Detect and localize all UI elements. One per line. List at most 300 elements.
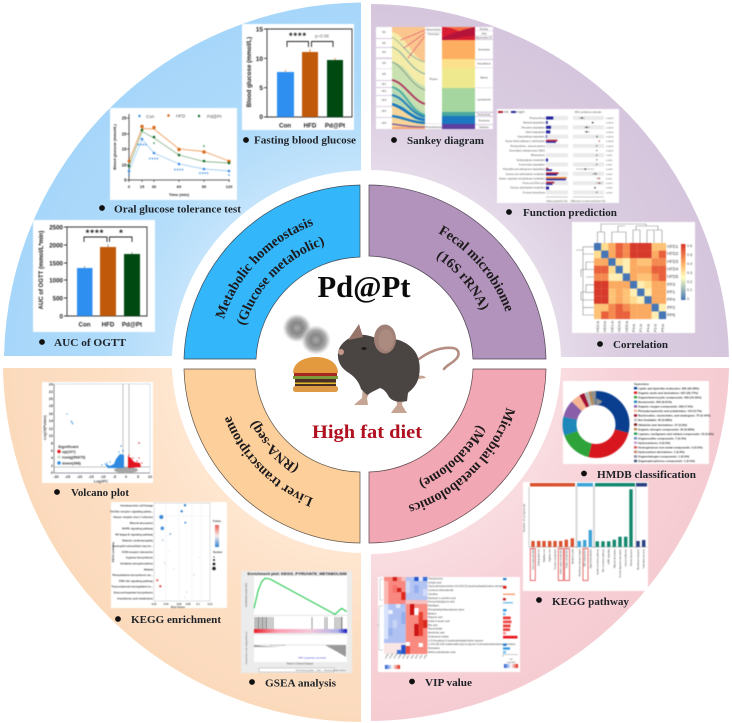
- chart: volcano plot: 0: [125, 475, 127, 479]
- heading sector: fecal microbiome: (16S rRNA): [436, 252, 488, 310]
- panel: metabolic homeostasis outer quadrant: [4, 2, 361, 356]
- chart: function prediction: Glycerolipid, sulfoquinovose SQDG: [509, 150, 545, 152]
- label: AUC of OGTT: AUC of OGTT: [54, 338, 126, 349]
- chart: correlation heatmap: PP5: [667, 312, 676, 318]
- chart: correlation heatmap: P4-b: [646, 324, 650, 332]
- chart: sankey diagram: Lactobacillus: [477, 98, 492, 102]
- chart: volcano plot: nosig(56875): [62, 456, 86, 460]
- heading sector: liver transcriptome: (RNA-seq): [250, 421, 298, 472]
- chart: KEGG pathway: Membrane transport: [637, 549, 640, 570]
- chart: fasting blood glucose: 10: [256, 56, 263, 63]
- heading sector: metabolic homeostasis: [184, 184, 360, 360]
- chart: function prediction: 95% confidence intervals: [575, 111, 602, 114]
- chart: oral glucose tolerance test: ****: [137, 144, 148, 150]
- chart: correlation heatmap: HFD1: [667, 244, 679, 249]
- chart: function prediction: Difference in mean proportion (%): [571, 200, 605, 203]
- chart: VIP value: PP1: [407, 654, 411, 660]
- chart: volcano plot: 4: [51, 456, 54, 460]
- chart: KEGG pathway: Bile secretion pathway: [602, 548, 605, 572]
- chart: function prediction: 0.0006: [606, 160, 613, 162]
- chart: KEGG enrichment: Number: [213, 551, 222, 554]
- chart: KEGG pathway: Histidine met: [543, 549, 546, 562]
- chart: sankey diagram: Roseburia: [479, 120, 490, 122]
- chart: KEGG pathway: Arginine met: [549, 549, 552, 562]
- chart: volcano plot: -Log10(Pvalue): [43, 415, 47, 441]
- chart: oral glucose tolerance test: 0: [128, 184, 131, 189]
- chart: volcano plot: 8: [51, 442, 53, 446]
- chart: HMDB classification: Organic acids and derivatives: 637 (20.77%): [638, 391, 698, 395]
- chart: VIP value: PP2: [411, 654, 415, 660]
- chart: GSEA analysis: Enrichment profile — Hits — Ranking metric scores: [296, 669, 347, 672]
- chart: sankey diagram: W1: [382, 31, 386, 34]
- chart: sankey diagram: [376, 27, 493, 129]
- chart: fasting blood glucose: ****: [289, 31, 307, 41]
- chart: function prediction: Superpathway degradation: [518, 136, 546, 139]
- chart: correlation heatmap: P2-b: [654, 324, 658, 332]
- chart: fasting blood glucose: 5: [259, 85, 263, 92]
- chart: VIP value: Betaine: [428, 612, 437, 615]
- chart: KEGG enrichment: Diabetic cardiomyopathy: [122, 538, 154, 542]
- chart: volcano plot: 22: [49, 390, 53, 394]
- chart: volcano plot: -15: [88, 475, 94, 479]
- chart: volcano plot: -30: [53, 475, 59, 479]
- label: fasting blood glucose: Fasting blood glucose: [254, 136, 356, 146]
- label: sankey diagram: Sankey diagram: [407, 136, 484, 147]
- chart: volcano plot: -20: [77, 475, 82, 479]
- chart: sankey diagram: Faecalibacul: [477, 62, 491, 66]
- chart: function prediction: Fructose biosynthesis: [523, 191, 546, 194]
- chart: function prediction: 0.00031: [606, 137, 614, 139]
- chart: VIP value: Cholesterol sulfate: [428, 635, 449, 638]
- chart: oral glucose tolerance test: *: [153, 142, 155, 148]
- chart: HMDB classification: Organosulfur compounds: 7 (0.4%): [638, 436, 686, 440]
- chart: oral glucose tolerance test: 15: [140, 184, 145, 189]
- chart: VIP value: HFD1: [385, 653, 390, 660]
- chart: KEGG enrichment: Phenylalanine biosynthesis etc...: [112, 573, 153, 577]
- chart: VIP value: Taurocholate: [428, 628, 443, 631]
- chart: function prediction: 0.0011: [606, 178, 613, 180]
- chart: function prediction: [497, 109, 619, 203]
- chart: fasting blood glucose: 0: [259, 114, 263, 121]
- heading sector: liver transcriptome: Liver transcriptome: [225, 416, 314, 507]
- chart: GSEA analysis: [241, 571, 352, 673]
- heading sector: liver transcriptome: [184, 368, 360, 544]
- chart: KEGG enrichment: Arginine biosynthesis: [126, 556, 154, 560]
- chart: KEGG enrichment: 0.02: [152, 603, 157, 606]
- chart: volcano plot: 12: [49, 427, 53, 431]
- chart: correlation heatmap: 0.6: [687, 244, 692, 248]
- chart: VIP value: PP3: [415, 654, 420, 660]
- chart: correlation heatmap: HFD4: [667, 266, 679, 272]
- chart: VIP value: Glycerophosphocholine (14:0/22:5) lysophosphatidylcholine derivative: [428, 585, 506, 588]
- chart: VIP value: Riboflavin: [428, 604, 440, 608]
- chart: VIP value: Myristoleic: [428, 647, 441, 650]
- label: volcano plot: Volcano plot: [71, 488, 130, 499]
- chart: function prediction: Alanine, aspartate and glutamate metabolism: [499, 177, 545, 180]
- chart: fasting blood glucose: HFD: [304, 122, 317, 130]
- heading sector: metabolic homeostasis: (Glucose metabolic): [237, 236, 324, 325]
- chart: function prediction: Glucose carbohydrate metabolism: [510, 187, 545, 190]
- chart: sankey diagram: Firmicutes: [428, 33, 440, 36]
- chart: oral glucose tolerance test: *: [228, 174, 230, 180]
- chart: HMDB classification: Organohalogen compounds: 1 (0.0%): [638, 455, 689, 459]
- chart: volcano plot: Log2FC: [94, 480, 108, 484]
- label: function prediction: Function prediction: [523, 208, 617, 219]
- label: KEGG enrichment: KEGG enrichment: [131, 615, 222, 626]
- chart: VIP value: HFD5: [402, 653, 408, 660]
- chart: VIP value: Myristoyl-L-carnitine acid: [428, 597, 456, 600]
- chart: oral glucose tolerance test: 15: [122, 146, 127, 152]
- chart: VIP value: Uridylic acid: [428, 581, 442, 584]
- chart: VIP value: Theobromine: [428, 578, 443, 580]
- chart: KEGG enrichment: Malaria: [144, 567, 154, 571]
- dendrograms: [598, 224, 662, 243]
- chart: oral glucose tolerance test: 20: [122, 132, 127, 136]
- chart: function prediction: Pd@Pt: [517, 111, 525, 114]
- chart: sankey diagram: W2: [382, 42, 386, 45]
- chart: oral glucose tolerance test: 10: [122, 162, 127, 168]
- chart: HMDB classification: Organic oxygen compounds: 269 (7.0%): [638, 405, 693, 409]
- chart: function prediction: Photosynthesis - antenna proteins: [510, 145, 546, 148]
- chart: correlation heatmap: P5-b: [661, 324, 665, 332]
- chart: GSEA analysis: 'HFD' (negatively correlated): [298, 656, 326, 660]
- label: GSEA analysis: GSEA analysis: [265, 678, 336, 690]
- chart: function prediction: Sucrose and carbohydrate metabolism: [506, 173, 545, 176]
- chart: volcano plot: 20: [49, 397, 53, 401]
- chart: GSEA analysis: Zero score at 5765: [270, 644, 285, 647]
- chart: HMDB classification: Phenylpropanoids and polyketides: 154 (5.7%): [638, 409, 702, 413]
- chart: sankey diagram: Dubosiella: [478, 48, 490, 52]
- chart: correlation heatmap: 0.5: [687, 253, 692, 257]
- chart: AUC of OGTT: 1000: [49, 278, 64, 284]
- chart: AUC of OGTT: 2500: [49, 224, 64, 232]
- chart: KEGG enrichment: Rich Factor: [171, 605, 185, 609]
- icon: nanoparticles: [284, 314, 330, 354]
- chart: KEGG enrichment: ECM-receptor interaction: [122, 550, 153, 554]
- chart: GSEA analysis: Ranked list metric (Signal2Noise): [245, 632, 248, 664]
- chart: oral glucose tolerance test: 60: [177, 184, 182, 189]
- chart: HMDB classification: Lignans, neolignans and related compounds: 16 (0.8%): [638, 432, 714, 436]
- label: correlation: Correlation: [613, 340, 668, 351]
- chart: VIP value: -log10(P): [506, 662, 516, 664]
- chart: function prediction: 0.0013: [606, 183, 613, 185]
- chart: KEGG pathway: Insulin secretion pathway: [596, 548, 599, 575]
- chart: volcano plot: 10: [49, 434, 53, 438]
- chart: KEGG pathway: Purine metabolism: [565, 549, 568, 568]
- chart: sankey diagram: W5: [382, 73, 386, 76]
- chart: VIP value: 1,2-Di-(9Z,12Z-octadecadienoyl)-sn-glycero-3-phosphoethanolamine derivative: [428, 643, 516, 646]
- chart: volcano plot: -5: [113, 475, 116, 479]
- chart: KEGG enrichment: Glucose/Aspartate biosynthesis: [114, 590, 154, 594]
- chart: function prediction: 0.00015: [606, 123, 614, 125]
- label: HMDB classification: HMDB classification: [597, 470, 696, 481]
- chart: HMDB classification: Organophosphorus compounds: 1 (0.0%): [638, 459, 695, 463]
- chart: KEGG pathway: Glycerophospholipid: [532, 548, 535, 570]
- chart: correlation heatmap: HFD2: [667, 251, 679, 256]
- chart: VIP value: HFD4: [398, 653, 403, 660]
- chart: KEGG enrichment: 0.12: [208, 603, 213, 606]
- chart: KEGG enrichment: Arachidonic acid metabolism: [117, 596, 154, 600]
- chart: volcano plot: -25: [65, 475, 70, 479]
- chart: function prediction: HFD: [504, 111, 509, 114]
- chart: oral glucose tolerance test: [110, 108, 237, 200]
- chart: oral glucose tolerance test: *: [203, 145, 205, 151]
- chart: HMDB classification: Benzenoids: 305 (9.91%): [638, 400, 672, 404]
- chart: KEGG enrichment: KEGG pathway: [111, 541, 115, 562]
- chart: AUC of OGTT: Pd@Pt: [122, 322, 142, 328]
- chart: oral glucose tolerance test: 25: [122, 116, 127, 120]
- chart: AUC of OGTT: 1500: [49, 260, 64, 268]
- chart: volcano plot: 24: [49, 382, 54, 386]
- chart: VIP value: Indole-3-acetic acid: [428, 620, 450, 623]
- chart: HMDB classification: Not Available: 30 (0.98%): [638, 418, 672, 422]
- chart: KEGG pathway: Tyrosine metabolism: [554, 549, 557, 570]
- label: oral glucose tolerance test: Oral glucose tolerance test: [114, 204, 242, 216]
- chart: sankey diagram: Muribac: [480, 28, 489, 31]
- chart: KEGG pathway: Amino sugar metabolism: [560, 549, 563, 574]
- chart: AUC of OGTT: Con: [78, 322, 91, 328]
- chart: AUC of OGTT: [33, 220, 155, 332]
- chart: function prediction: 0.00047: [606, 150, 614, 152]
- chart: sankey diagram: Ileibacter: [479, 126, 489, 129]
- chart: fasting blood glucose: Con: [279, 122, 291, 130]
- chart: correlation heatmap: 0: [687, 297, 689, 301]
- chart: oral glucose tolerance test: HFD: [176, 114, 186, 118]
- chart: KEGG pathway: Mineral absorption: [613, 548, 616, 568]
- chart: KEGG pathway: [522, 482, 648, 591]
- chart: AUC of OGTT: ****: [86, 228, 104, 239]
- chart: correlation heatmap: PP2: [667, 305, 676, 310]
- chart: VIP value: VIP: [509, 659, 513, 661]
- chart: KEGG enrichment: 0.1: [196, 603, 200, 606]
- chart: function prediction: 0.00024: [606, 132, 614, 134]
- chart: function prediction: Fucose/xylan degradation: [519, 164, 546, 166]
- chart: KEGG enrichment: 0.04: [164, 603, 169, 606]
- chart: KEGG enrichment: Herpes simplex virus 1 infection: [113, 515, 153, 519]
- chart: volcano plot: Significant: [58, 444, 79, 449]
- chart: VIP value: HFD3: [394, 653, 399, 660]
- chart: HMDB classification: Organoheterocyclic compounds: 460 (15.00%): [638, 395, 701, 399]
- chart: HMDB classification: Organic nitrogen compounds: 30 (0.98%): [638, 427, 694, 431]
- chart: volcano plot: 2: [51, 464, 53, 468]
- chart: KEGG enrichment: Hematopoietic cell lineage: [120, 504, 154, 508]
- chart: VIP value: 1-O-Hexadecyl-2-lysophosphatidylcholine species: [428, 639, 484, 642]
- chart: KEGG enrichment: Transcriptional misregulation in...: [111, 585, 153, 589]
- chart: volcano plot: 16: [49, 412, 53, 416]
- chart: correlation heatmap: 0.1: [687, 288, 692, 292]
- chart: function prediction: 0.0008: [606, 169, 613, 171]
- chart: HMDB classification: [563, 381, 714, 464]
- chart: sankey diagram: HF2: [382, 90, 387, 93]
- donut chart: [570, 398, 622, 451]
- chart: KEGG enrichment: 0.06: [177, 603, 182, 606]
- chart: HMDB classification: Hydrocarbon derivatives: 1 (0.0%): [638, 450, 685, 454]
- heading sector: fecal microbiome: [368, 184, 546, 360]
- label: VIP value: [409, 678, 472, 689]
- chart: VIP value: Citrulline: [428, 593, 438, 596]
- chart: sankey diagram: W4: [382, 62, 386, 65]
- chart: KEGG enrichment: PI3K-Akt signaling pathway: [119, 579, 154, 583]
- chart: VIP value: Linoleoyl ethanolamide: [428, 589, 454, 592]
- chart: sankey diagram: Proteobacteria: [425, 126, 442, 129]
- chart: oral glucose tolerance test: 30: [152, 184, 157, 189]
- chart: function prediction: Purine and DNA cycle: [523, 182, 546, 185]
- chart: volcano plot: 10: [148, 475, 152, 479]
- chart: function prediction: 0.00041: [606, 146, 614, 148]
- chart: correlation heatmap: HD5-b: [625, 321, 629, 332]
- chart: KEGG enrichment: Neutrophil extracellular trap for...: [112, 544, 153, 548]
- icon: mouse: [338, 324, 459, 413]
- chart: oral glucose tolerance test: ****: [199, 172, 209, 178]
- chart: function prediction: Glycan folded pathway in carbohydrate: [505, 140, 546, 143]
- chart: volcano plot: down(398): [62, 462, 82, 466]
- chart: sankey diagram: Romboutsia: [478, 114, 491, 116]
- chart: sankey diagram: HF3: [382, 99, 387, 102]
- chart: HMDB classification: Superclass: [634, 382, 649, 386]
- chart: function prediction: 0.0007: [606, 164, 613, 166]
- chart: volcano plot: 18: [49, 404, 53, 408]
- chart: VIP value: Phosphatidylethanolamine lysine: [428, 608, 465, 611]
- chart: correlation heatmap: PP4: [667, 297, 676, 302]
- chart: sankey diagram: Blautia: [480, 76, 488, 80]
- chart: oral glucose tolerance test: ****: [174, 168, 184, 174]
- chart: GSEA analysis: Rank in Ordered Dataset: [287, 662, 314, 666]
- chart: KEGG pathway: ABC transporters: [584, 548, 587, 567]
- chart: correlation heatmap: P3-b: [632, 324, 636, 332]
- chart: AUC of OGTT: 2000: [49, 242, 64, 250]
- chart: KEGG pathway: Metabolic path: [571, 548, 574, 564]
- chart: VIP value: Hippuric acid: [428, 616, 443, 619]
- chart: KEGG pathway: Human diseases: [631, 548, 633, 566]
- chart: HMDB classification: Hydrocarbons: 9 (0.3%): [638, 441, 670, 445]
- panel: liver transcriptome outer quadrant: [3, 368, 361, 722]
- chart: correlation heatmap: HFD5: [667, 274, 679, 279]
- chart: function prediction: Mean proportion (%): [547, 200, 568, 203]
- title: Pd@Pt: Pd@Pt: [318, 270, 411, 304]
- chart: VIP value: [377, 577, 520, 672]
- chart: fasting blood glucose: 15: [256, 26, 263, 34]
- chart: volcano plot: up(107): [62, 450, 76, 454]
- chart: HMDB classification: Homogeneous non-metal compounds: 3 (0.0%): [638, 446, 703, 450]
- chart: sankey diagram: HF5: [382, 122, 387, 125]
- chart: function prediction: 0.00033: [606, 141, 614, 143]
- chart: KEGG pathway: Cancer pathways: [625, 548, 628, 567]
- chart: sankey diagram: Phylum: [429, 78, 438, 81]
- chart: KEGG pathway: cAMP signaling: [608, 548, 611, 565]
- chart: function prediction: 0.0005: [606, 155, 613, 157]
- chart: correlation heatmap: [572, 222, 695, 333]
- chart: function prediction: 0.0009: [606, 174, 613, 176]
- chart: function prediction: Polysulfide and sulfoquinone degradation: [503, 168, 546, 171]
- heatmap: [384, 577, 427, 654]
- chart: function prediction: Sulfopolyglycan metabolism: [517, 159, 545, 162]
- chart: sankey diagram: Bacteroides CF: [476, 36, 493, 40]
- chart: function prediction: Ribose/purine: [531, 154, 546, 157]
- chart: KEGG enrichment: MAPK signaling pathway: [122, 527, 154, 531]
- chart: correlation heatmap: HD4-b: [618, 321, 622, 332]
- chart: oral glucose tolerance test: Pd@Pt: [207, 114, 222, 119]
- chart: HMDB classification: Alkaloids and derivatives: 27 (0.9%): [638, 423, 687, 427]
- chart: KEGG enrichment: Toll-like receptor signaling pathw...: [110, 509, 153, 513]
- chart: volcano plot: 14: [49, 419, 54, 423]
- chart: GSEA analysis: Enrichment score (ES): [245, 583, 248, 607]
- chart: correlation heatmap: 0.4: [687, 262, 692, 266]
- chart: function prediction: 0.0018: [606, 192, 613, 194]
- chart: oral glucose tolerance test: 120: [226, 184, 233, 189]
- chart: sankey diagram: Bacteroidota: [426, 28, 441, 32]
- chart: VIP value: Muricholic acid: [428, 632, 445, 635]
- chart: KEGG enrichment: Mineral absorption: [130, 521, 153, 525]
- chart: function prediction: Bacterial degradation: [523, 122, 546, 125]
- chart: function prediction: Phenazine degradation: [521, 126, 546, 129]
- chart: HMDB classification: Nucleosides, nucleotides, and analogues: 75 (2.44%): [638, 414, 710, 418]
- chart: oral glucose tolerance test: Blood glucose (mmol/L): [112, 124, 117, 170]
- panel: fecal microbiome outer quadrant: [371, 4, 729, 357]
- chart: sankey diagram: W3: [382, 51, 386, 54]
- label: VIP value: VIP value: [425, 678, 472, 689]
- chart: VIP value: Bile acid: [428, 624, 438, 627]
- chart: oral glucose tolerance test: Con: [146, 114, 155, 119]
- chart: correlation heatmap: HD3-b: [603, 321, 607, 332]
- chart: oral glucose tolerance test: ****: [149, 158, 159, 164]
- chart: KEGG pathway: Translation process: [643, 548, 646, 569]
- chart: KEGG pathway: Sphingolipid met: [538, 549, 541, 566]
- chart: AUC of OGTT: AUC of OGTT (mmol/L*min): [39, 231, 45, 309]
- heading sector: microbial metabolomics: Microbial metabolomics: [408, 407, 516, 512]
- panel: microbial metabolomics outer quadrant: [371, 368, 729, 721]
- chart: GSEA analysis: Enrichment plot: KEGG_PYRUVATE_METABOLISM: [248, 571, 346, 576]
- chart: oral glucose tolerance test: 5: [124, 178, 127, 182]
- chart: oral glucose tolerance test: 90: [202, 184, 207, 189]
- chart: correlation heatmap: PP1: [667, 290, 676, 294]
- chart: fasting blood glucose: [242, 24, 354, 130]
- chart: VIP value: PP5: [424, 654, 428, 660]
- chart: function prediction: 0.0016: [606, 188, 613, 190]
- chart: KEGG pathway: Membrane transport signal: [578, 549, 581, 576]
- chart: correlation heatmap: P1-b: [639, 324, 643, 332]
- chart: correlation heatmap: HD2-b: [596, 321, 600, 332]
- chart: function prediction: 0.00012: [606, 118, 614, 120]
- chart: volcano plot: [42, 382, 153, 484]
- chart: KEGG enrichment: 0.08: [186, 603, 191, 606]
- chart: correlation heatmap: HFD3: [667, 259, 679, 264]
- chart: function prediction: Photosynthesis: [529, 117, 546, 120]
- chart: AUC of OGTT: HFD: [102, 322, 115, 328]
- chart: oral glucose tolerance test: *: [128, 174, 130, 180]
- chart: VIP value: Deoxycholylglycine acid: [428, 601, 455, 604]
- label: KEGG pathway: KEGG pathway: [552, 597, 630, 608]
- chart: KEGG pathway: Number of compounds: [522, 503, 526, 532]
- chart: KEGG enrichment: Oxidative phosphorylation: [120, 562, 153, 566]
- chart: oral glucose tolerance test: Time (min): [169, 192, 190, 197]
- chart: sankey diagram: Alisti: [481, 32, 487, 36]
- chart: volcano plot: 5: [137, 475, 139, 479]
- heading sector: metabolic homeostasis: Metabolic homeostasis: [215, 218, 313, 320]
- chart: fasting blood glucose: p=0.06: [315, 34, 329, 38]
- chart: correlation heatmap: 0.3: [687, 271, 692, 275]
- chart: KEGG enrichment: [110, 502, 227, 609]
- chart: KEGG enrichment: Pvalue: [213, 520, 222, 523]
- chart: fasting blood glucose: Blood glucose (mmol/L): [246, 37, 253, 107]
- chart: volcano plot: -10: [100, 475, 106, 479]
- heading sector: microbial metabolomics: (Metabolome): [420, 426, 486, 488]
- chart: KEGG pathway: Protein digestion absorption: [619, 548, 622, 577]
- heading sector: fecal microbiome: Fecal microbiome: [438, 225, 512, 312]
- chart: VIP value: Methyl palmitoleate ester: [428, 651, 456, 654]
- chart: volcano plot: 0: [51, 471, 53, 475]
- subtitle: High fat diet: High fat diet: [312, 422, 423, 443]
- chart: VIP value: HFD2: [389, 653, 395, 660]
